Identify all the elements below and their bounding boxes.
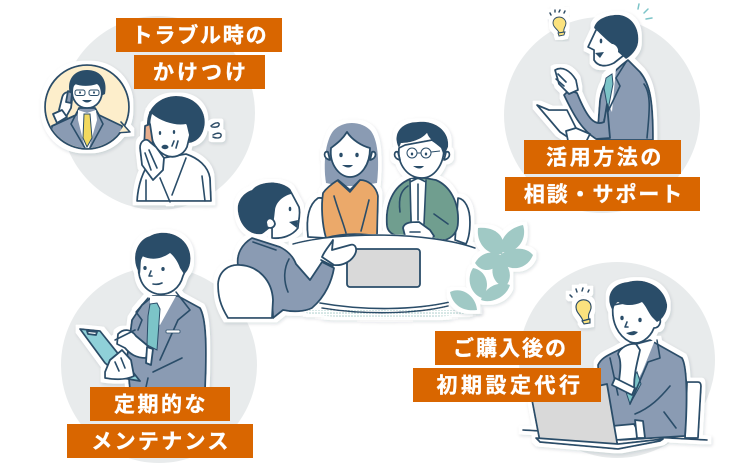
label: usage line two bbox=[505, 177, 700, 211]
label: setup line one: ご購入後の bbox=[453, 336, 568, 360]
background circle bottom right bbox=[519, 262, 715, 458]
panel: trouble call-out support bbox=[45, 16, 282, 210]
label: trouble line two bbox=[134, 55, 265, 89]
panel: initial setup service bbox=[413, 262, 715, 458]
icon: light bulb bottom right bbox=[570, 288, 591, 324]
panel: usage consultation bbox=[504, 4, 700, 213]
label: maintenance line two: メンテナンス bbox=[91, 430, 231, 454]
icon: worried woman on phone bbox=[137, 96, 221, 202]
background circle bottom left bbox=[61, 267, 257, 463]
icon: man thinking at laptop bbox=[523, 281, 707, 449]
background circle top left bbox=[61, 16, 255, 210]
label: maintenance line one bbox=[90, 387, 230, 421]
label: trouble line two: かけつけ bbox=[153, 62, 249, 84]
icon: consultant in speech bubble bbox=[45, 65, 130, 150]
label: trouble line one: トラブル時の bbox=[132, 24, 268, 48]
icon: presenting man with document bbox=[537, 15, 653, 142]
label: usage line two: 相談・サポート bbox=[524, 184, 684, 206]
label: maintenance line one: 定期的な bbox=[114, 394, 208, 416]
icon: teal emphasis marks bbox=[638, 4, 652, 19]
icon: light bulb top right bbox=[550, 10, 566, 36]
label: setup line one bbox=[435, 331, 581, 365]
label: maintenance line two bbox=[67, 424, 253, 458]
label: usage line one bbox=[524, 140, 681, 174]
icon: teal leaves bbox=[450, 225, 533, 310]
panel: regular maintenance bbox=[61, 233, 257, 463]
illustration: meeting around a table bbox=[218, 122, 483, 318]
panel: center meeting scene bbox=[218, 122, 533, 318]
icon: man with clipboard bbox=[80, 233, 206, 390]
label: usage line one: 活用方法の bbox=[546, 146, 664, 170]
label: trouble line one bbox=[116, 18, 282, 52]
label: setup line two bbox=[413, 368, 601, 402]
label: setup line two: 初期設定代行 bbox=[436, 374, 584, 398]
background circle top right bbox=[504, 17, 700, 213]
